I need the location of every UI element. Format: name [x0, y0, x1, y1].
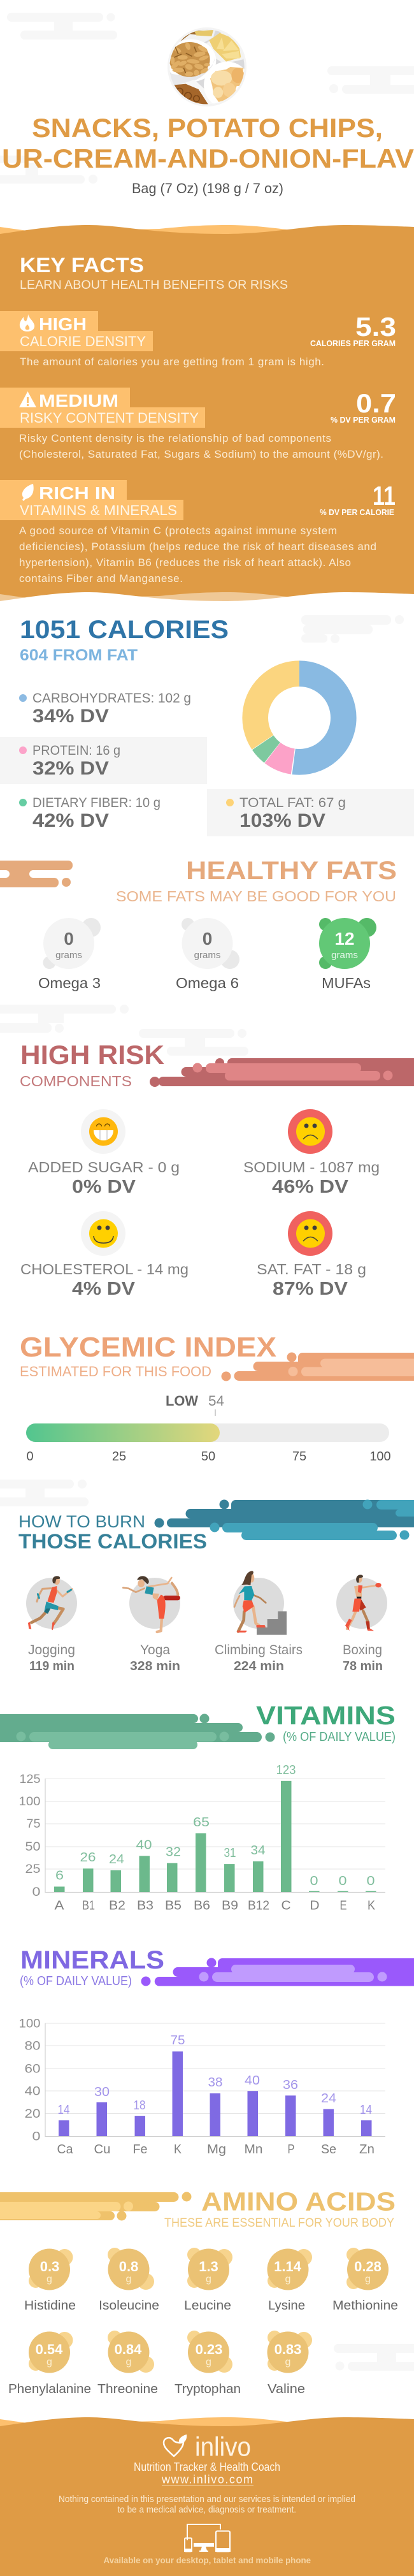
- title: UR-CREAM-AND-ONION-FLAV: [2, 143, 414, 173]
- bar chart: vitamins: 100: [19, 1795, 41, 1808]
- bar chart: minerals: 80: [24, 2040, 41, 2053]
- bar chart: vitamins: 24: [109, 1852, 124, 1867]
- key facts heading: KEY FACTS: [20, 254, 144, 277]
- gauge scale: 100: [369, 1450, 391, 1464]
- healthy fats subheading: SOME FATS MAY BE GOOD FOR YOU: [116, 888, 396, 905]
- macro: protein: PROTEIN: 16 g: [32, 743, 120, 758]
- bar chart: vitamins: 25: [25, 1863, 41, 1876]
- exercise labels: Boxing: [343, 1643, 382, 1657]
- healthy fats heading: HEALTHY FATS: [186, 857, 397, 885]
- amino: lysine: 1.14: [274, 2259, 302, 2274]
- icon: devices: [184, 2524, 231, 2552]
- title: [2, 113, 414, 173]
- gauge marker label: LOW: [166, 1393, 198, 1409]
- amino: lysine: g: [285, 2274, 290, 2285]
- gauge scale: [26, 1450, 391, 1464]
- fact: rich in vitamins and minerals: RICH IN: [39, 483, 115, 503]
- bar chart: minerals: [19, 2017, 385, 2157]
- high risk subheading: COMPONENTS: [20, 1073, 132, 1089]
- amino: lysine: [268, 2249, 312, 2313]
- amino: isoleucine: g: [126, 2274, 131, 2285]
- amino: histidine: 0.3: [40, 2259, 59, 2274]
- stat: MUFAs: [319, 918, 376, 991]
- risk: added sugar: 0% DV: [72, 1177, 136, 1197]
- risk: saturated fat: SAT. FAT - 18 g: [257, 1261, 366, 1277]
- amino: phenylalanine: g: [46, 2357, 52, 2368]
- bar chart: minerals: 75: [171, 2034, 185, 2048]
- fact: rich in vitamins and minerals: contains Fiber and Manganese.: [19, 572, 183, 585]
- risk: cholesterol: 4% DV: [72, 1279, 136, 1299]
- exercise: jogging: [26, 1576, 77, 1630]
- bar chart: minerals: Mn: [245, 2143, 262, 2157]
- bar chart: vitamins: 75: [27, 1817, 41, 1831]
- stat: omega 6: 0: [203, 929, 212, 949]
- bar chart: minerals: 40: [24, 2085, 41, 2099]
- calories from fat: 604 FROM FAT: [20, 646, 138, 664]
- bar chart: minerals: 60: [24, 2063, 41, 2076]
- bar chart: minerals: Ca: [57, 2143, 73, 2157]
- panel: key facts: [0, 225, 414, 612]
- bar chart: vitamins: E: [340, 1898, 346, 1912]
- high risk heading: HIGH RISK: [20, 1040, 164, 1070]
- amino: histidine: [24, 2249, 76, 2313]
- exercise labels: Yoga: [140, 1643, 170, 1657]
- decorative bar: high risk: [150, 1058, 414, 1087]
- donut chart: [238, 656, 361, 780]
- bar chart: vitamins: B3: [137, 1898, 153, 1912]
- availability note: Available on your desktop, tablet and mobile phone: [103, 2555, 311, 2565]
- bar chart: minerals: Cu: [94, 2143, 111, 2157]
- minerals heading: MINERALS: [20, 1946, 164, 1974]
- bar chart: minerals: P: [288, 2143, 294, 2157]
- amino: tryptophan: [175, 2331, 241, 2396]
- macro: carbohydrates: [19, 691, 191, 727]
- bar chart: minerals: Mg: [207, 2143, 226, 2157]
- bar chart: minerals: 30: [94, 2085, 110, 2099]
- icon: flame: [20, 314, 34, 331]
- decorative bar: healthy fats: [0, 861, 73, 887]
- fact: calorie density: CALORIES PER GRAM: [310, 338, 396, 348]
- stat: omega 6: grams: [194, 950, 220, 961]
- macro: dietary fiber: 42% DV: [32, 810, 109, 831]
- bar chart: vitamins: B12: [248, 1898, 269, 1912]
- bar chart: vitamins: 0: [32, 1886, 41, 1899]
- panel: amino acids: [0, 2187, 398, 2396]
- panel: how to burn calories: [18, 1499, 414, 1673]
- bar chart: minerals: 100: [19, 2017, 41, 2031]
- fact: risky content density: % DV PER GRAM: [331, 415, 396, 425]
- amino: valine: 0.83: [275, 2341, 301, 2357]
- website link: www.inlivo.com: [161, 2473, 253, 2486]
- bar chart: vitamins: B2: [109, 1898, 125, 1912]
- amino: phenylalanine: [8, 2332, 91, 2396]
- amino: tryptophan: Tryptophan: [175, 2382, 241, 2396]
- fact: rich in vitamins and minerals: [0, 480, 396, 585]
- amino acids heading: AMINO ACIDS: [201, 2187, 396, 2216]
- decorative bar: burn: [154, 1499, 414, 1540]
- bar chart: vitamins: 40: [136, 1838, 152, 1852]
- gauge scale: 0: [26, 1450, 34, 1464]
- fact: calorie density: HIGH: [39, 314, 87, 334]
- bar chart: minerals: 36: [283, 2078, 298, 2092]
- bar chart: vitamins: 34: [251, 1844, 265, 1858]
- exercise durations: [29, 1659, 383, 1673]
- bar chart: minerals: Zn: [359, 2143, 375, 2157]
- amino: threonine: 0.84: [115, 2341, 142, 2357]
- amino: phenylalanine: 0.54: [36, 2341, 63, 2357]
- bar chart: vitamins: A: [55, 1898, 64, 1912]
- fact: rich in vitamins and minerals: A good source of Vitamin C (protects against immune system: [19, 525, 337, 537]
- macro: dietary fiber: DIETARY FIBER: 10 g: [32, 796, 161, 810]
- fact: risky content density: RISKY CONTENT DENSITY: [20, 410, 199, 426]
- amino: methionine: Methionine: [332, 2299, 398, 2313]
- macro: dietary fiber: [19, 796, 161, 831]
- fact: calorie density: The amount of calories you are getting from 1 gram is high.: [20, 356, 324, 368]
- risk: saturated fat: 87% DV: [273, 1279, 348, 1299]
- amino acids subheading: THESE ARE ESSENTIAL FOR YOUR BODY: [164, 2216, 394, 2230]
- title: SNACKS, POTATO CHIPS,: [32, 113, 383, 143]
- amino: phenylalanine: Phenylalanine: [8, 2382, 91, 2396]
- risk: added sugar: [28, 1109, 180, 1197]
- hero image: snack bowls: [168, 27, 246, 106]
- amino: tryptophan: 0.23: [196, 2341, 222, 2357]
- serving size subtitle: Bag (7 Oz) (198 g / 7 oz): [132, 180, 283, 196]
- stat: MUFAs: 12: [334, 929, 355, 949]
- amino: methionine: 0.28: [354, 2259, 382, 2274]
- bar chart: vitamins: 32: [166, 1845, 181, 1859]
- disclaimer: [59, 2494, 355, 2515]
- glycemic subheading: ESTIMATED FOR THIS FOOD: [20, 1364, 211, 1379]
- fact: calorie density: CALORIE DENSITY: [20, 333, 146, 349]
- exercise labels: Jogging: [28, 1643, 75, 1657]
- burn heading: HOW TO BURN: [18, 1512, 145, 1531]
- decorative bar: minerals: [141, 1958, 414, 1986]
- bar chart: minerals: 18: [134, 2099, 145, 2113]
- fact: risky content density: 0.7: [356, 388, 396, 418]
- macro: total fat: TOTAL FAT: 67 g: [239, 796, 346, 810]
- macro: total fat: [226, 796, 346, 831]
- amino: leucine: 1.3: [199, 2259, 218, 2274]
- bar chart: minerals: 24: [321, 2092, 336, 2106]
- bar chart: vitamins: B9: [222, 1898, 238, 1912]
- risk: sodium: 46% DV: [272, 1177, 349, 1197]
- logo wordmark: inlivo: [195, 2431, 251, 2462]
- amino: isoleucine: 0.8: [119, 2259, 138, 2274]
- icon: leaf: [22, 484, 34, 501]
- glycemic heading: GLYCEMIC INDEX: [20, 1332, 276, 1363]
- exercise: climbing stairs: [233, 1571, 287, 1635]
- fact: calorie density: [0, 311, 396, 368]
- stat: omega 6: [176, 918, 239, 991]
- exercise durations: 328 min: [130, 1659, 180, 1673]
- bar chart: vitamins: K: [368, 1898, 376, 1912]
- bar chart: minerals: 0: [32, 2130, 41, 2143]
- risk: cholesterol: CHOLESTEROL - 14 mg: [20, 1261, 189, 1277]
- fact: rich in vitamins and minerals: deficiencies), Potassium (helps reduce the risk of heart diseases and: [19, 541, 376, 553]
- amino: isoleucine: [99, 2248, 159, 2313]
- fact: rich in vitamins and minerals: 11: [373, 481, 396, 511]
- bar chart: minerals: Fe: [132, 2143, 148, 2157]
- exercise: boxing: [336, 1575, 387, 1631]
- panel: glycemic index: [20, 1332, 414, 1464]
- icon: warning triangle: [19, 391, 36, 407]
- amino: threonine: Threonine: [97, 2382, 158, 2396]
- bar chart: vitamins: 65: [193, 1816, 210, 1830]
- legend backgrounds: [0, 737, 414, 836]
- vitamins heading: VITAMINS: [256, 1701, 396, 1730]
- tagline: Nutrition Tracker & Health Coach: [134, 2461, 280, 2473]
- exercise labels: [28, 1643, 382, 1657]
- risk: sodium: SODIUM - 1087 mg: [243, 1159, 380, 1175]
- amino: valine: [268, 2331, 312, 2396]
- risk: sodium: [243, 1109, 380, 1197]
- gauge marker label: 54: [208, 1393, 224, 1409]
- gauge scale: 75: [292, 1450, 306, 1464]
- bar chart: vitamins: B6: [194, 1898, 210, 1912]
- bar chart: vitamins: 50: [25, 1840, 41, 1854]
- gauge scale: 25: [112, 1450, 126, 1464]
- amino: isoleucine: Isoleucine: [99, 2299, 159, 2313]
- stat: MUFAs: MUFAs: [322, 975, 371, 991]
- decorative bar: amino acids: [0, 2192, 191, 2221]
- fact: risky content density: (Cholesterol, Saturated Fat, Sugars & Sodium) to the amount (%DV/gr).: [19, 448, 383, 460]
- amino: methionine: [332, 2248, 398, 2313]
- gauge marker label: [166, 1393, 224, 1416]
- stat: MUFAs: grams: [331, 950, 358, 961]
- panel: footer: [0, 2417, 414, 2576]
- risk: cholesterol: [20, 1211, 189, 1299]
- amino: tryptophan: g: [206, 2357, 211, 2368]
- amino: valine: g: [285, 2357, 290, 2368]
- disclaimer: Nothing contained in this presentation and our services is intended or implied: [59, 2494, 355, 2505]
- stat: omega 3: [38, 918, 101, 991]
- fact: rich in vitamins and minerals: % DV PER CALORIE: [320, 507, 394, 517]
- amino: leucine: g: [206, 2274, 211, 2285]
- exercise labels: Climbing Stairs: [215, 1643, 303, 1657]
- bar chart: minerals: 14: [360, 2103, 372, 2117]
- disclaimer: to be a medical advice, diagnosis or treatment.: [117, 2505, 296, 2515]
- gauge scale: 50: [201, 1450, 215, 1464]
- fact: calorie density: 5.3: [355, 312, 396, 342]
- amino: leucine: Leucine: [184, 2299, 231, 2313]
- decorative bar: glycemic: [222, 1353, 414, 1381]
- macro: protein: [19, 743, 120, 779]
- calories heading: 1051 CALORIES: [20, 616, 229, 644]
- amino: leucine: [184, 2248, 232, 2313]
- risk: saturated fat: [257, 1211, 366, 1299]
- bar chart: vitamins: 0: [339, 1874, 346, 1888]
- gauge bar: [26, 1423, 389, 1442]
- key facts subheading: LEARN ABOUT HEALTH BENEFITS OR RISKS: [20, 279, 288, 292]
- bar chart: vitamins: [19, 1763, 385, 1912]
- bar chart: vitamins: D: [310, 1898, 320, 1912]
- amino: histidine: g: [46, 2274, 52, 2285]
- bar chart: vitamins: 26: [80, 1851, 96, 1865]
- fact: risky content density: Risky Content density is the relationship of bad components: [19, 432, 331, 444]
- fact: risky content density: [0, 388, 396, 460]
- panel: calories: [0, 616, 414, 836]
- burn heading: [18, 1512, 207, 1553]
- bar chart: vitamins: B1: [82, 1898, 95, 1912]
- risk: added sugar: ADDED SUGAR - 0 g: [28, 1159, 180, 1175]
- bar chart: minerals: K: [174, 2143, 182, 2157]
- bar chart: vitamins: 31: [224, 1846, 236, 1860]
- amino: lysine: Lysine: [268, 2299, 305, 2313]
- bar chart: vitamins: C: [282, 1898, 290, 1912]
- burn heading: THOSE CALORIES: [18, 1530, 207, 1553]
- bar chart: vitamins: 125: [19, 1773, 41, 1786]
- amino: histidine: Histidine: [24, 2299, 76, 2313]
- stat: omega 3: 0: [64, 929, 74, 949]
- fact: rich in vitamins and minerals: hypertension), Vitamin B6 (reduces the risk of heart attack). Also: [19, 557, 351, 569]
- bar chart: vitamins: B5: [165, 1898, 182, 1912]
- panel: healthy fats: [0, 857, 397, 991]
- fact: risky content density: MEDIUM: [39, 391, 118, 411]
- stat: omega 6: Omega 6: [176, 975, 239, 991]
- minerals subheading: (% OF DAILY VALUE): [20, 1974, 132, 1988]
- amino: threonine: g: [126, 2357, 131, 2368]
- bar chart: vitamins: 0: [367, 1874, 375, 1888]
- bar chart: minerals: 20: [24, 2107, 41, 2121]
- stat: omega 3: grams: [55, 950, 82, 961]
- macro: carbohydrates: CARBOHYDRATES: 102 g: [32, 691, 191, 706]
- exercise: yoga: [123, 1576, 180, 1632]
- stat: omega 3: Omega 3: [38, 975, 101, 991]
- exercise durations: 224 min: [234, 1659, 284, 1673]
- exercise durations: 119 min: [29, 1659, 75, 1673]
- bar chart: minerals: Se: [321, 2143, 336, 2157]
- bar chart: vitamins: 123: [276, 1763, 296, 1777]
- exercise durations: 78 min: [343, 1659, 383, 1673]
- panel: minerals: [19, 1946, 414, 2157]
- vitamins subheading: (% OF DAILY VALUE): [283, 1730, 396, 1744]
- panel: high risk components: [20, 1040, 414, 1299]
- wave divider: key facts bottom: [0, 592, 414, 612]
- macro: protein: 32% DV: [32, 758, 109, 779]
- macro: carbohydrates: 34% DV: [32, 706, 109, 727]
- bar chart: minerals: 38: [208, 2076, 223, 2090]
- macro: total fat: 103% DV: [239, 810, 325, 831]
- bar chart: minerals: 14: [57, 2103, 70, 2117]
- amino: valine: Valine: [268, 2382, 305, 2396]
- decorative bar: vitamins: [0, 1714, 275, 1749]
- fact: rich in vitamins and minerals: VITAMINS & MINERALS: [20, 502, 177, 518]
- bar chart: minerals: 40: [245, 2074, 260, 2088]
- amino: methionine: g: [365, 2274, 371, 2285]
- panel: vitamins: [0, 1701, 396, 1912]
- bar chart: vitamins: 6: [55, 1869, 64, 1883]
- amino: threonine: [97, 2331, 158, 2396]
- logo: heart and leaf: [164, 2434, 187, 2456]
- bar chart: vitamins: 0: [310, 1874, 318, 1888]
